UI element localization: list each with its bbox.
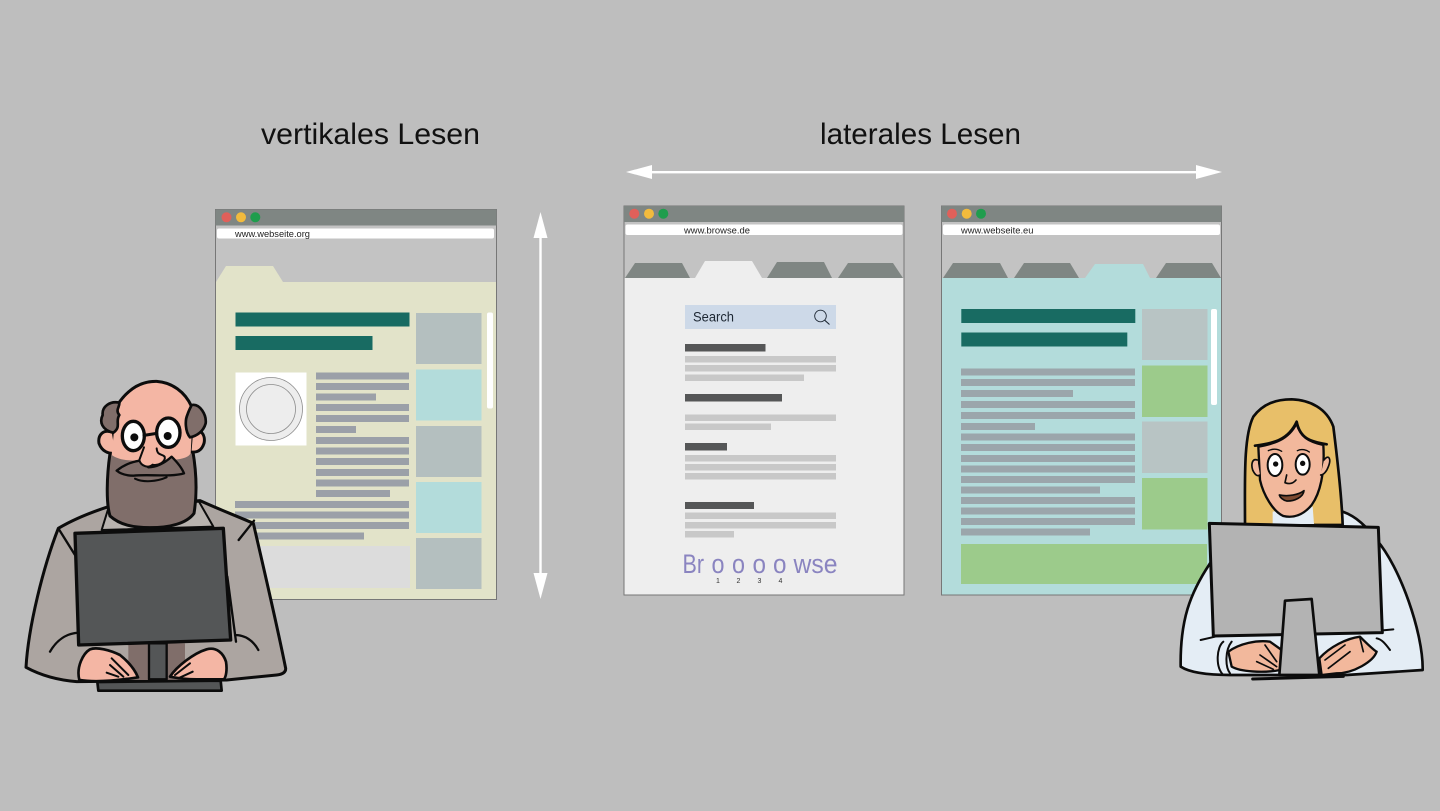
image placeholder: plate xyxy=(236,372,306,446)
pagination: Brooooowse: Br xyxy=(682,549,704,579)
nose xyxy=(1285,475,1296,484)
ears xyxy=(1252,457,1330,476)
pagination: Brooooowse: 1 xyxy=(716,578,720,585)
blouse xyxy=(1181,512,1423,675)
face xyxy=(1258,423,1324,517)
arrow: horizontal double arrow xyxy=(626,165,1222,179)
hands xyxy=(1228,637,1377,675)
glasses xyxy=(122,421,144,451)
hair xyxy=(1245,399,1343,525)
address bar: www.webseite.eu: www.webseite.eu xyxy=(960,225,1034,235)
base line xyxy=(1253,676,1343,679)
address bar: www.browse.de: www.browse.de xyxy=(683,225,750,235)
mouth xyxy=(135,477,167,481)
address bar: www.browse.de xyxy=(626,224,902,235)
jacket xyxy=(26,501,286,682)
pagination: Brooooowse: o xyxy=(732,549,745,579)
title: laterales Lesen: laterales Lesen xyxy=(820,118,1021,151)
pagination: Brooooowse: wse xyxy=(793,549,838,579)
title: vertikales Lesen: vertikales Lesen xyxy=(261,118,480,151)
eyes xyxy=(1268,454,1282,476)
bald head fill xyxy=(112,381,193,461)
panel: browser window www.webseite.org xyxy=(216,210,496,600)
hair xyxy=(101,402,206,437)
search box: Search xyxy=(693,310,734,324)
search box xyxy=(685,305,836,329)
illustration: bearded man at computer xyxy=(26,381,286,691)
collar xyxy=(1273,507,1314,524)
pagination: Brooooowse: o xyxy=(773,549,786,579)
address bar: www.webseite.eu xyxy=(943,224,1220,235)
pagination: Brooooowse xyxy=(682,549,838,585)
beard xyxy=(107,450,196,528)
fringe xyxy=(1255,422,1327,446)
address bar: www.webseite.org xyxy=(217,228,494,239)
arrow: vertical double arrow xyxy=(534,212,548,599)
pagination: Brooooowse: o xyxy=(712,549,724,579)
hands xyxy=(79,648,227,681)
pagination: Brooooowse: 2 xyxy=(737,578,741,585)
address bar: www.webseite.org: www.webseite.org xyxy=(234,229,310,239)
pagination: Brooooowse: 3 xyxy=(758,578,762,585)
monitor xyxy=(75,528,231,645)
bald head outline xyxy=(117,381,192,407)
pagination: Brooooowse: 4 xyxy=(779,578,783,585)
pagination: Brooooowse: o xyxy=(752,549,766,579)
nose xyxy=(139,447,165,467)
panel: browser window www.browse.de xyxy=(624,206,904,595)
mouth xyxy=(1279,491,1304,501)
keyboard base xyxy=(97,681,222,691)
ears xyxy=(99,430,204,453)
illustration: blonde woman at computer xyxy=(1181,399,1423,679)
monitor xyxy=(1209,523,1382,636)
moustache xyxy=(117,457,184,476)
panel: browser window www.webseite.eu xyxy=(942,206,1222,595)
monitor stand xyxy=(1279,599,1319,675)
tie and stand xyxy=(128,643,185,680)
